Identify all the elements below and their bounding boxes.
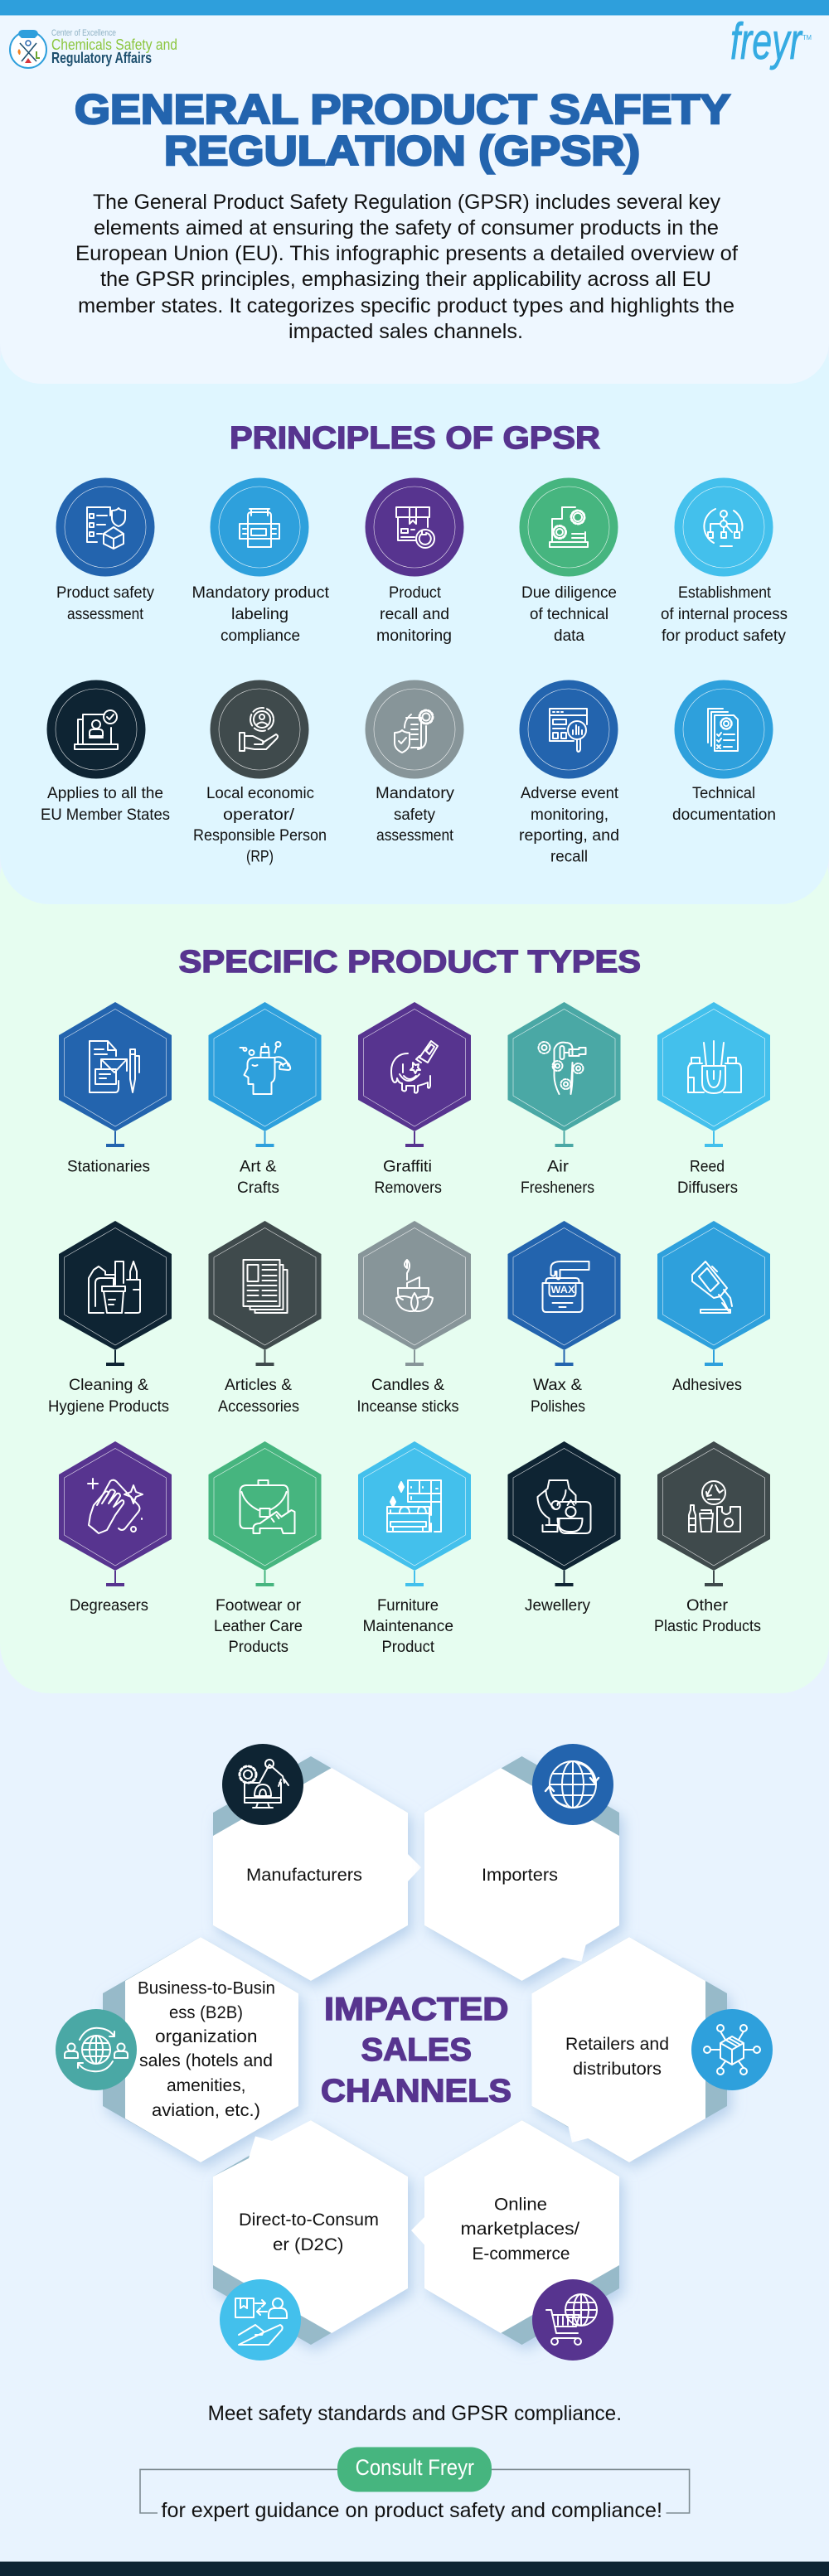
label: ess (B2B) (169, 2003, 243, 2022)
label: Mandatory (376, 785, 455, 802)
heading: impacted sales channels: SALES (361, 2032, 472, 2068)
label: Plastic Products (654, 1618, 761, 1635)
panel: specific product types background (0, 829, 829, 1693)
label: Maintenance (363, 1618, 453, 1635)
card: establishment of internal process (661, 477, 788, 645)
icon: process network (704, 509, 742, 546)
label: Art & (240, 1159, 277, 1175)
label: er (D2C) (273, 2235, 343, 2254)
label (237, 1159, 279, 1197)
top colour bar (0, 0, 829, 15)
icon: reed diffuser (688, 1041, 741, 1093)
label: data (554, 627, 584, 645)
button: consult freyr: Consult Freyr (356, 2455, 474, 2480)
icon: candle with leaves (396, 1260, 433, 1311)
intro paragraph: impacted sales channels. (288, 320, 523, 343)
label (531, 1377, 585, 1416)
label (214, 1597, 303, 1656)
icon: air freshener can and flowers (539, 1042, 585, 1094)
icon: globe with arrows (545, 1761, 599, 1808)
card: mandatory safety assessment (365, 680, 464, 845)
label: organization (155, 2027, 257, 2046)
label: distributors (573, 2060, 662, 2079)
label (521, 1159, 594, 1197)
label: marketplaces/ (461, 2220, 579, 2239)
logo: freyr: TM (802, 34, 812, 41)
label: sales (hotels and (139, 2051, 273, 2070)
heading: principles of GPSR: PRINCIPLES OF GPSR (230, 421, 600, 456)
icon: monitor and robotic arm (240, 1760, 288, 1808)
label: operator/ (223, 806, 295, 824)
icon: cleaning bottles and tub (89, 1261, 140, 1313)
label: Local economic (206, 785, 314, 802)
label: Online (494, 2196, 547, 2215)
label (363, 1597, 453, 1656)
label: assessment (376, 827, 454, 845)
card: wax and polishes (507, 1221, 620, 1416)
icon: browser and magnifier (550, 709, 587, 752)
title: GENERAL PRODUCT SAFETY (75, 86, 730, 133)
label (193, 785, 327, 865)
label (138, 1979, 275, 2120)
icon: box network (704, 2025, 760, 2075)
card: mandatory product labeling compliance (192, 477, 330, 645)
channel: business-to-business (56, 1937, 298, 2162)
channel: retailers and distributors (532, 1937, 773, 2162)
panel: header background (0, 0, 829, 384)
label (565, 2035, 669, 2079)
icon: laptop with gears (550, 507, 588, 547)
label: Articles & (225, 1377, 292, 1394)
logo: Chemicals Safety and Regulatory Affairs (10, 28, 177, 68)
label (677, 1159, 738, 1197)
label: Adhesives (672, 1377, 742, 1394)
label: Polishes (531, 1398, 585, 1416)
label: Technical (692, 785, 755, 802)
card: articles and accessories (209, 1221, 322, 1416)
label: recall (550, 849, 588, 865)
icon: shield, document and gear (395, 710, 433, 753)
call to action (140, 2447, 690, 2522)
icon: wax jar: WAX (550, 1284, 575, 1295)
label: monitoring, (531, 806, 608, 824)
label: Crafts (237, 1179, 279, 1197)
icon: necklace and ring box (537, 1480, 590, 1533)
card: adhesives (657, 1221, 770, 1394)
label (375, 1159, 442, 1197)
label (672, 785, 776, 824)
label: Cleaning & (69, 1377, 148, 1394)
label: Hygiene Products (48, 1398, 169, 1416)
label: E-commerce (473, 2244, 570, 2264)
label (218, 1377, 299, 1416)
label: Jewellery (525, 1597, 590, 1615)
icon: sofa and shelves (387, 1480, 441, 1532)
title: REGULATION (GPSR) (164, 128, 640, 174)
label: Applies to all the (47, 785, 163, 802)
label: assessment (67, 606, 144, 623)
label (519, 785, 619, 865)
label: Adverse event (521, 785, 619, 802)
heading: specific product types: SPECIFIC PRODUCT TYPES (179, 945, 641, 980)
icon: dripping smiley and marker (391, 1041, 438, 1093)
intro paragraph (75, 191, 738, 343)
label: Furniture (377, 1597, 439, 1615)
label: Business-to-Busin (138, 1979, 275, 1998)
card: technical documentation (672, 680, 776, 824)
icon: glue tube (692, 1261, 732, 1313)
label: Diffusers (677, 1179, 738, 1197)
heading: impacted sales channels (321, 1992, 511, 2109)
channel: manufacturers (213, 1744, 421, 1981)
label (56, 584, 154, 623)
label: Wax & (533, 1377, 582, 1394)
logo: Chemicals Safety and Regulatory Affairs: Center of Excellence (51, 28, 116, 38)
title (75, 86, 730, 174)
label: Due diligence (521, 584, 617, 602)
icon: recycle and plastics (689, 1481, 740, 1532)
label: safety (394, 806, 435, 824)
icon: wax jar (542, 1261, 589, 1312)
icon: newspaper (244, 1260, 287, 1313)
card: stationaries (59, 1002, 172, 1175)
channel: direct-to-consumer (213, 2120, 408, 2361)
label: Product (381, 1639, 435, 1656)
panel: principles background (0, 315, 829, 904)
label: monitoring (376, 627, 452, 645)
label: Establishment (678, 584, 772, 602)
card: graffiti removers (358, 1002, 471, 1197)
label (192, 584, 330, 645)
label: aviation, etc.) (152, 2101, 260, 2120)
label: Product (389, 584, 442, 602)
card: jewellery (507, 1441, 620, 1615)
label: Mandatory product (192, 584, 330, 602)
label (376, 785, 455, 845)
card: product recall and monitoring (365, 477, 464, 645)
icon: labeling machine (240, 509, 279, 547)
label: Direct-to-Consum (239, 2210, 379, 2230)
label: Air (547, 1159, 570, 1175)
icon: parcel, person and hand (235, 2298, 287, 2345)
intro paragraph: member states. It categorizes specific product types and highlights the (78, 294, 734, 317)
card: reed diffusers (657, 1002, 770, 1197)
card: other plastic products (654, 1441, 770, 1635)
label: Importers (482, 1866, 558, 1885)
label: Products (229, 1639, 288, 1656)
label (48, 1377, 169, 1416)
label: (RP) (246, 849, 274, 865)
label (356, 1377, 459, 1416)
icon: bag and shoe (240, 1480, 295, 1533)
card: adverse event monitoring (519, 680, 619, 865)
card: candles and incense sticks (356, 1221, 471, 1416)
label: for product safety (662, 627, 787, 645)
label: reporting, and (519, 827, 619, 845)
icon: globe with people (65, 2028, 128, 2071)
heading: impacted sales channels: IMPACTED (324, 1992, 509, 2027)
label: documentation (672, 806, 776, 824)
intro paragraph: The General Product Safety Regulation (GPSR) includes several key (93, 191, 720, 214)
card: furniture maintenance (358, 1441, 471, 1656)
label: Removers (375, 1179, 442, 1197)
card: product safety assessment (56, 477, 154, 623)
label: of internal process (661, 606, 788, 623)
card: degreasers (59, 1441, 172, 1615)
intro paragraph: European Union (EU). This infographic presents a detailed overview of (75, 242, 738, 265)
label: EU Member States (41, 806, 170, 824)
logo: Chemicals Safety and Regulatory Affairs: Chemicals Safety and (51, 36, 177, 53)
label: Product safety (56, 584, 154, 602)
card: cleaning and hygiene products (48, 1221, 172, 1416)
label: Retailers and (565, 2035, 669, 2054)
label: Inceanse sticks (356, 1398, 459, 1416)
icon: checklist, shield and box (87, 507, 125, 549)
label: amenities, (167, 2076, 245, 2095)
label: of technical (530, 606, 608, 623)
closing statement: Meet safety standards and GPSR compliance. (208, 2402, 622, 2425)
icon: box with recall arrow (396, 507, 434, 548)
label (661, 584, 788, 645)
label: Degreasers (70, 1597, 148, 1615)
icon: hand holding person target (240, 708, 278, 751)
icon: laptop with person and check (75, 710, 118, 749)
label: Reed (690, 1159, 725, 1175)
label: Fresheners (521, 1179, 594, 1197)
label: compliance (221, 627, 300, 645)
label: labeling (231, 606, 288, 623)
intro paragraph: the GPSR principles, emphasizing their applicability across all EU (100, 268, 711, 291)
label (521, 584, 617, 645)
card: art and crafts (209, 1002, 322, 1197)
label: Footwear or (216, 1597, 302, 1615)
card: due diligence of technical data (519, 477, 618, 645)
icon: documents and pencil (90, 1041, 139, 1092)
label: Other (686, 1597, 729, 1615)
button: consult freyr (337, 2447, 492, 2491)
footer bar (0, 2562, 829, 2576)
channel: online marketplaces (411, 2120, 619, 2361)
label: Candles & (371, 1377, 444, 1394)
card: footwear or leather care (209, 1441, 322, 1656)
logo: Chemicals Safety and Regulatory Affairs: Regulatory Affairs (51, 50, 152, 66)
card: local economic operator (193, 680, 327, 865)
icon: shopping cart and globe (546, 2294, 597, 2345)
call to action text: for expert guidance on product safety and compliance! (161, 2499, 662, 2522)
label (654, 1597, 761, 1635)
icon: hand wiping (88, 1479, 143, 1533)
card: air fresheners (507, 1002, 620, 1197)
label: Graffiti (383, 1159, 432, 1175)
intro paragraph: elements aimed at ensuring the safety of consumer products in the (94, 216, 719, 240)
label (376, 584, 452, 645)
label: recall and (380, 606, 449, 623)
label (461, 2196, 579, 2264)
icon: document stack with gear (708, 709, 738, 751)
label: Leather Care (214, 1618, 303, 1635)
label (41, 785, 170, 824)
label: Stationaries (67, 1159, 150, 1175)
label: Accessories (218, 1398, 299, 1416)
heading: impacted sales channels: CHANNELS (321, 2074, 511, 2109)
label: Responsible Person (193, 827, 327, 845)
label (239, 2210, 379, 2254)
label: Manufacturers (246, 1866, 362, 1885)
card: applies to all EU member states (41, 680, 170, 824)
channel: importers (424, 1744, 619, 1981)
icon: head with art supplies (240, 1042, 290, 1094)
